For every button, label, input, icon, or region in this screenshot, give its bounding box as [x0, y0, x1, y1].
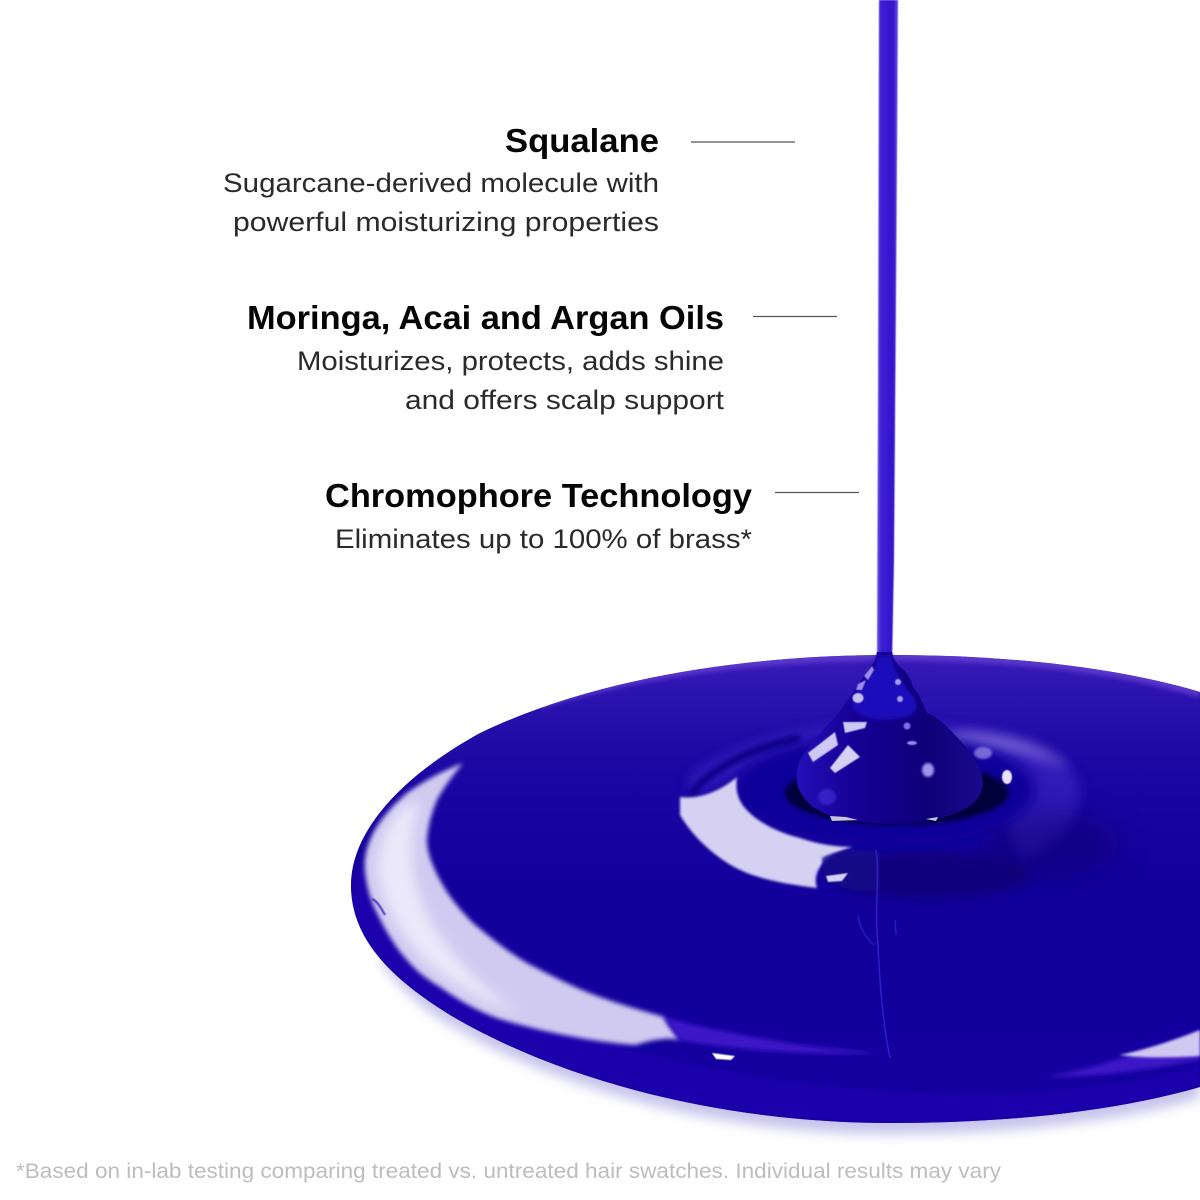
callout: Squalane: Sugarcane-derived molecule with: [223, 168, 659, 198]
lower dark shade: [830, 851, 1030, 899]
footnote: *Based on in-lab testing comparing treated vs. untreated hair swatches. Individual results may vary: [16, 1160, 1002, 1183]
central drop: [785, 652, 1012, 825]
crescent glint: [826, 873, 848, 882]
drop glint 5: [922, 763, 934, 777]
callout: Moringa, Acai and Argan Oils: Moisturizes, protects, adds shine: [297, 346, 724, 376]
drop left soft reflection: [818, 789, 836, 805]
callout: Chromophore Technology: [325, 477, 859, 554]
callout: Squalane: powerful moisturizing properties: [233, 207, 659, 237]
drop shoulder highlight: [852, 693, 864, 703]
lit top edge: [540, 656, 1200, 704]
right ripple highlight: [950, 732, 1072, 770]
rim ripple mark: [372, 899, 385, 915]
central crescent highlight: [680, 777, 853, 888]
dark well around drop: [735, 734, 1035, 846]
crescent ripple reflection: [822, 850, 880, 891]
callout: Moringa, Acai and Argan Oils: and offers scalp support: [405, 385, 725, 415]
drip side strands: [858, 915, 896, 945]
drop glint 3: [904, 722, 910, 730]
rim glints: [830, 816, 938, 821]
callout: Moringa, Acai and Argan Oils: [247, 299, 837, 415]
callout: Squalane: [223, 122, 795, 237]
drop upper highlights: [856, 666, 874, 690]
dark streak above crescent: [690, 738, 800, 795]
drop left highlight: [808, 732, 838, 762]
thin vertical drip: [876, 850, 890, 1058]
puddle shadow: [380, 900, 1200, 1134]
bottom right highlight: [1042, 1030, 1200, 1077]
bright rim glare: [374, 802, 507, 1009]
dark right-hand shade: [980, 811, 1120, 879]
drop mid highlight: [843, 722, 867, 733]
black pool under drop: [785, 761, 1009, 825]
lower-left highlight fade: [664, 1017, 888, 1054]
drop glint 4: [907, 741, 917, 745]
callout: Chromophore Technology: Eliminates up to 100% of brass*: [335, 524, 753, 554]
callout: Chromophore Technology: Chromophore Technology: [325, 477, 753, 514]
drop bright neck: [852, 655, 916, 720]
drop glint 2: [897, 696, 903, 702]
drop glints: [895, 679, 901, 685]
callout: Squalane: Squalane: [505, 122, 659, 159]
bottom right glare: [1119, 1030, 1200, 1057]
drop lower highlight: [830, 745, 860, 773]
bottom rim band: [351, 860, 1200, 1123]
liquid puddle: [340, 650, 1200, 1130]
drop body: [797, 652, 983, 824]
callout: Moringa, Acai and Argan Oils: Moringa, Acai and Argan Oils: [247, 299, 724, 336]
small rim glint: [712, 1053, 735, 1060]
left rim highlight base: [365, 763, 680, 1045]
stream of liquid: [877, 0, 898, 665]
pool glint: [1002, 770, 1012, 784]
upper ripple ring: [690, 722, 1080, 860]
ripple soft highlight: [974, 747, 992, 759]
